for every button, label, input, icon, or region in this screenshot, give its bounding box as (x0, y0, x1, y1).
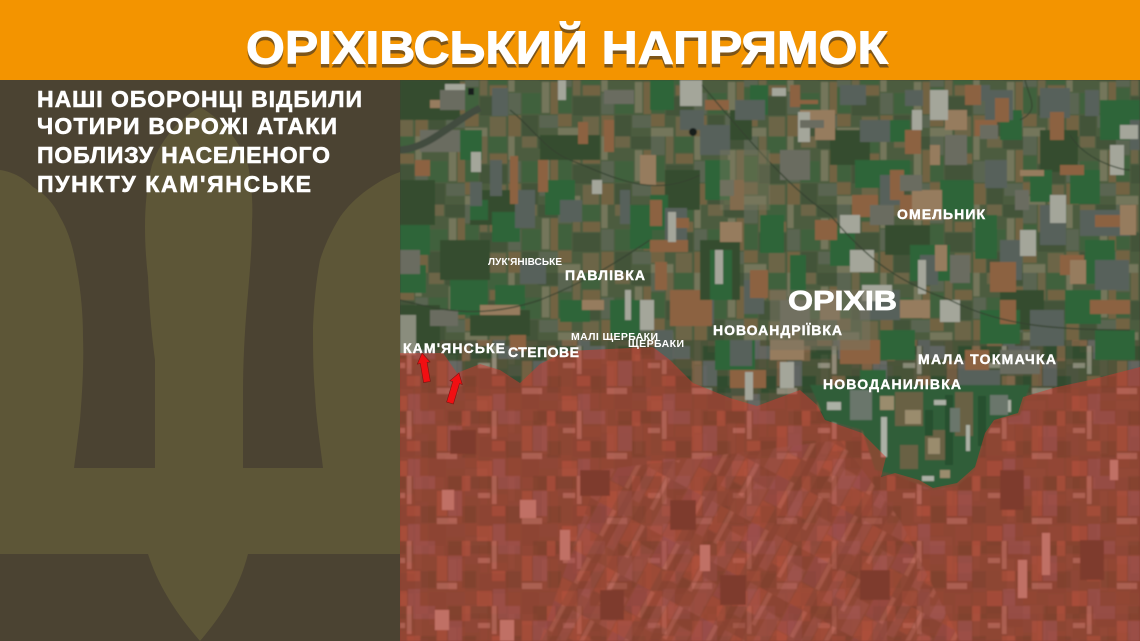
green salient fields south of Orikhiv (810, 385, 1030, 490)
map labels: ЛУК'ЯНІВСЬКЕ (488, 257, 562, 268)
map labels: НОВОАНДРІЇВКА (713, 322, 842, 338)
title shadow: ОРІХІВСЬКИЙ НАПРЯМОК (246, 25, 889, 77)
map labels: ОМЕЛЬНИК (897, 206, 985, 222)
map labels: МАЛІ ЩЕРБАКИ (571, 331, 658, 343)
text block: summary: НАШІ ОБОРОНЦІ ВІДБИЛИ (37, 86, 362, 112)
map labels: ЩЕРБАКИ (628, 338, 684, 350)
map labels: КАМ'ЯНСЬКЕ (403, 340, 505, 356)
map labels (403, 206, 1056, 392)
text block: summary: ПУНКТУ КАМ'ЯНСЬКЕ (37, 171, 311, 197)
title bar (0, 0, 1140, 80)
map labels: НОВОДАНИЛІВКА (823, 376, 961, 392)
arrow: attack near Kamianske east (447, 373, 462, 404)
map labels: СТЕПОВЕ (508, 344, 579, 360)
occupied territory overlay (400, 347, 1140, 641)
map labels: ПАВЛІВКА (565, 267, 645, 283)
bright fields in south (435, 460, 1118, 641)
map labels: МАЛА ТОКМАЧКА (918, 351, 1056, 367)
text block: summary: ЧОТИРИ ВОРОЖІ АТАКИ (37, 113, 337, 139)
arrow: attack near Kamianske west (417, 353, 430, 383)
panel: satellite map (400, 80, 1140, 641)
text block: summary (37, 86, 362, 197)
left panel background (0, 80, 400, 641)
icon: trident emblem watermark (0, 107, 400, 641)
map labels: ОРІХІВ (788, 285, 897, 316)
river (400, 108, 480, 150)
tonal veil over map (400, 80, 1140, 641)
town textures (720, 150, 770, 210)
title: ОРІХІВСЬКИЙ НАПРЯМОК (246, 22, 889, 74)
text block: summary: ПОБЛИЗУ НАСЕЛЕНОГО (37, 142, 330, 168)
upper fields: dark green (400, 80, 1078, 350)
